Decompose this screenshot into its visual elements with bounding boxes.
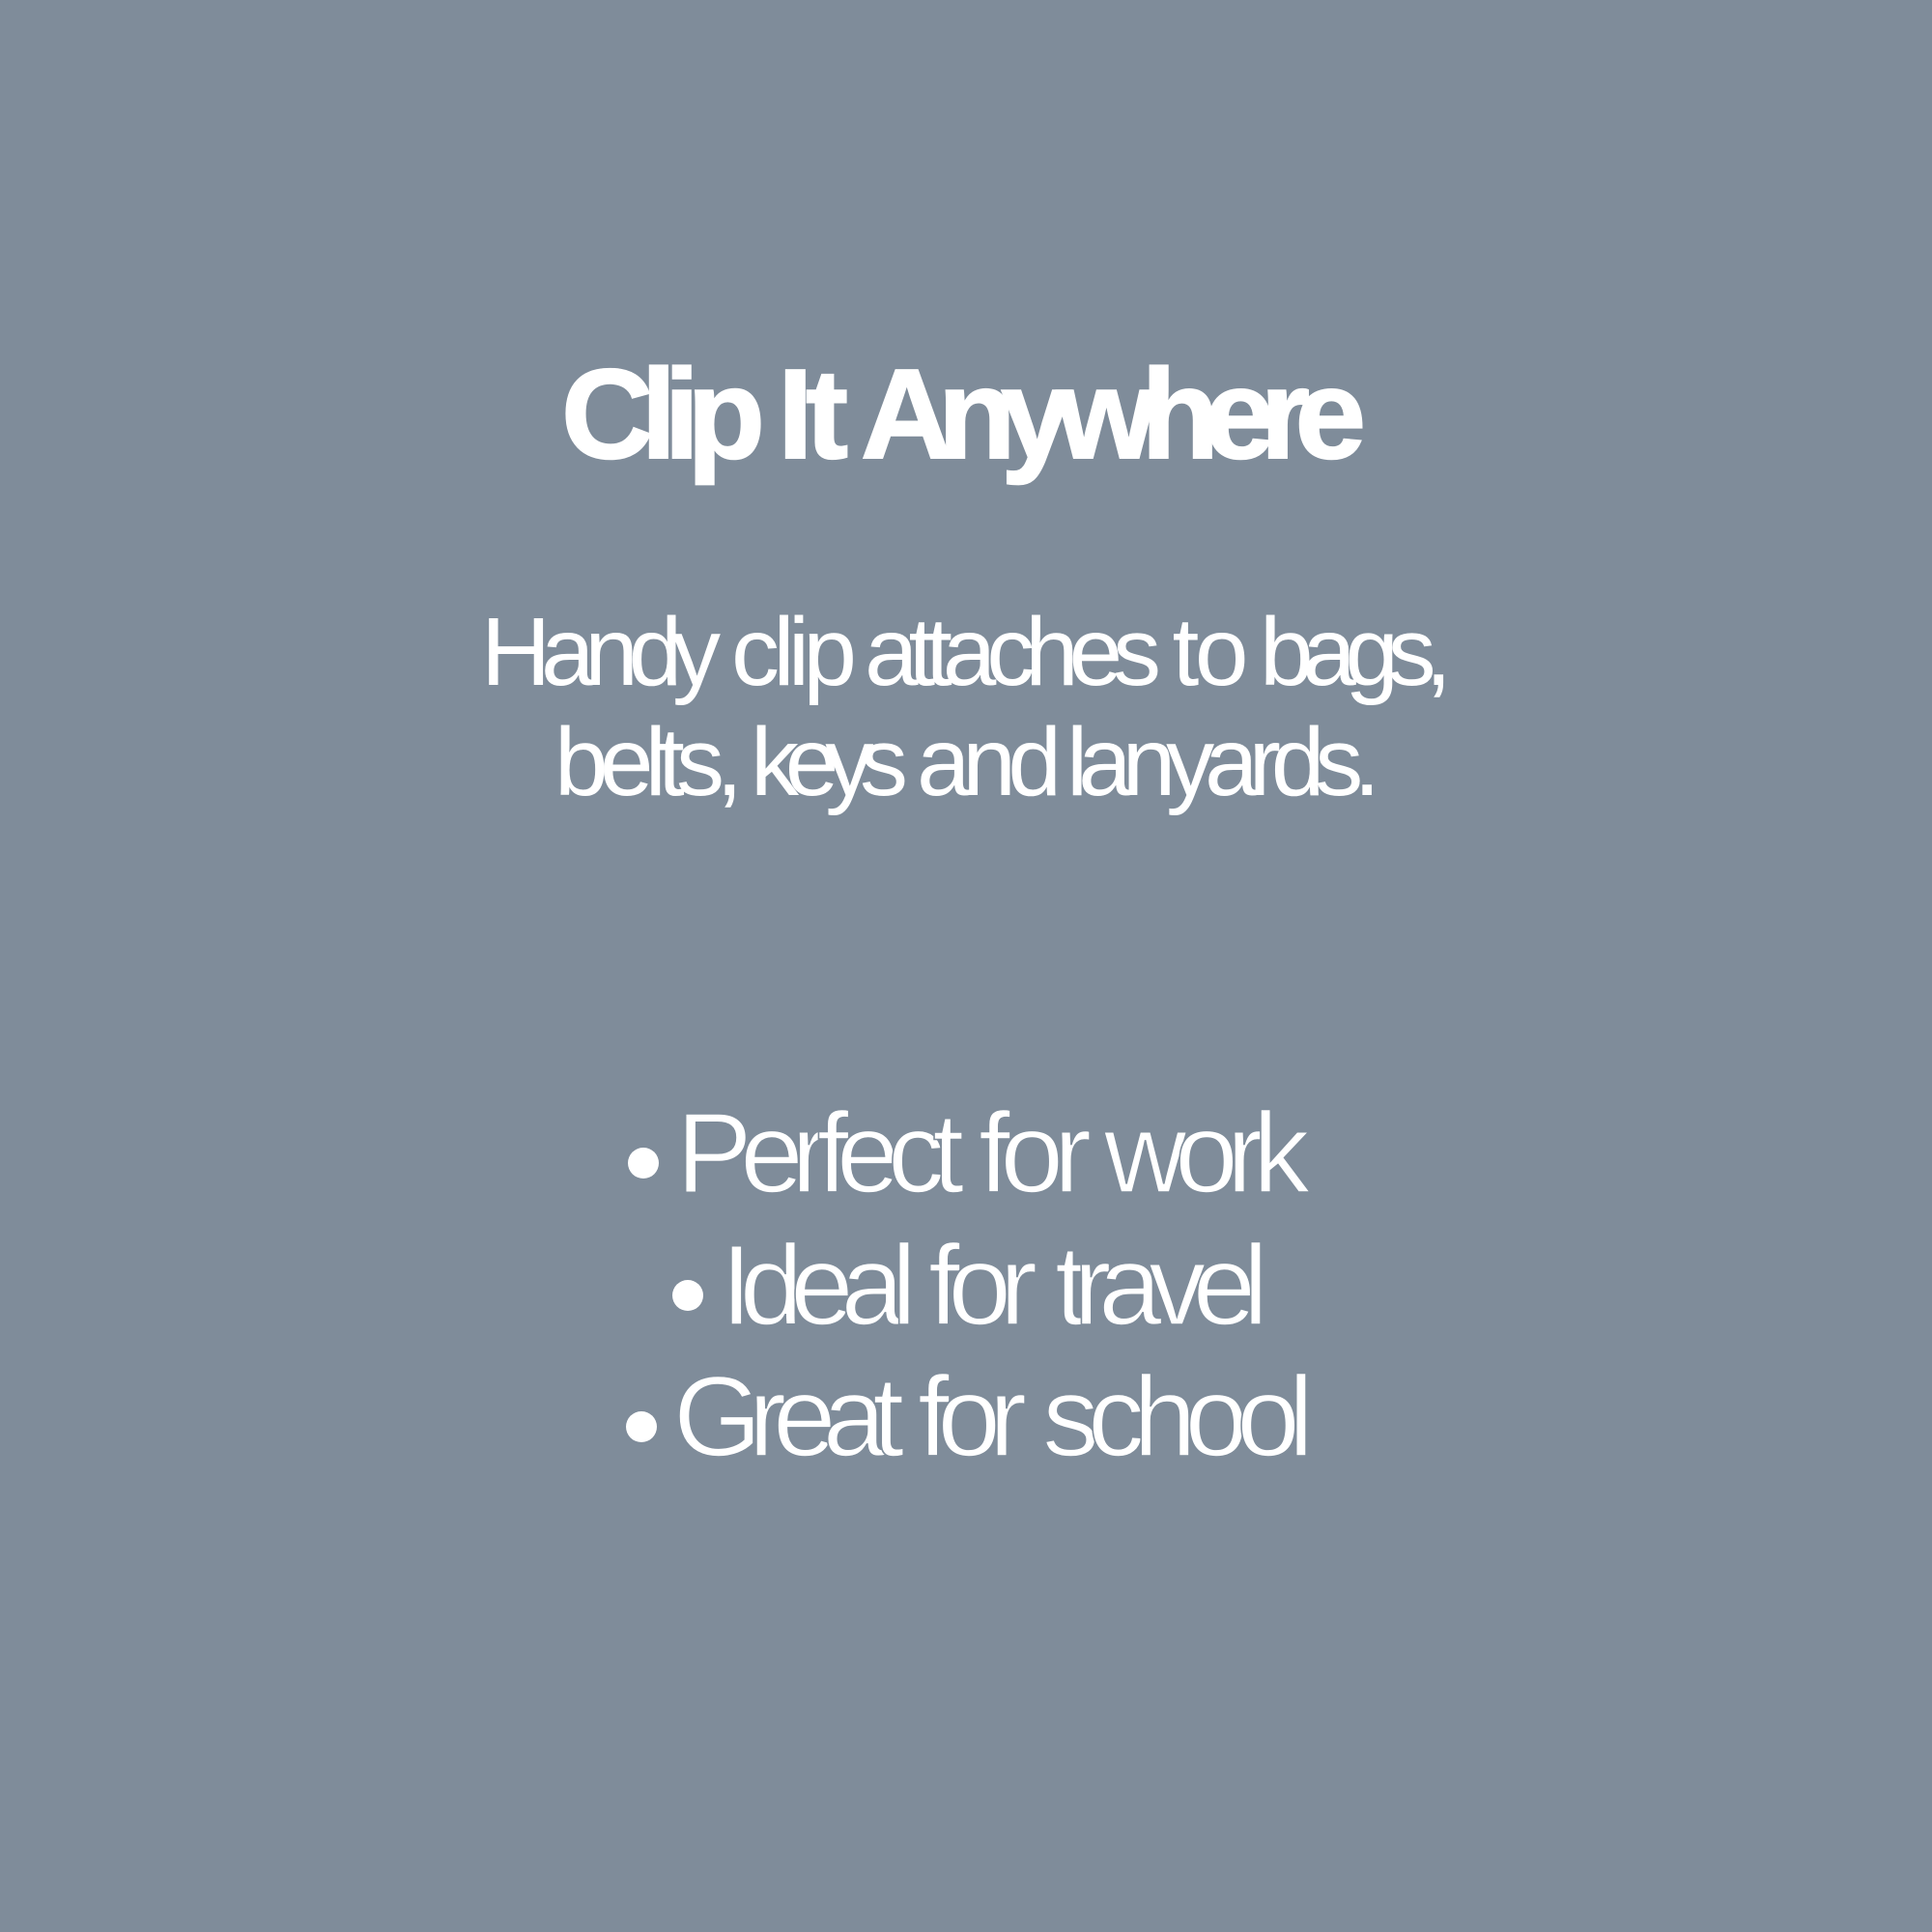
description line 2: keys [751,708,908,816]
bullet list [626,1090,1314,1481]
bullet item: travel: for [928,1222,1037,1350]
bullet item: school: for [918,1353,1027,1481]
description line 2: belts, [554,708,743,816]
description line 1: Handy [481,598,721,706]
bullet item: work: work [1103,1090,1311,1217]
description line 1: clip [731,598,857,706]
bullet item: travel [672,1222,1268,1350]
title: Clip [561,343,765,485]
bullet item: work [628,1090,1311,1217]
bullet item: work: for [979,1090,1092,1217]
description line 1: to [1173,598,1248,706]
description line 1: attaches [865,598,1161,706]
bullet item: school: Great [673,1353,904,1481]
description text [481,598,1452,816]
bullet item: travel: Ideal [721,1222,917,1350]
bullet item: travel: travel [1055,1222,1268,1350]
bullet item: work: Perfect [676,1090,964,1217]
bullet item: school: school [1042,1353,1314,1481]
description line 1: bags, [1260,598,1452,706]
bullet item: school [626,1353,1314,1481]
title: It [778,343,848,485]
title: Anywhere [861,343,1366,485]
description line 2: and [917,708,1062,816]
description line 2: lanyards. [1066,708,1380,816]
